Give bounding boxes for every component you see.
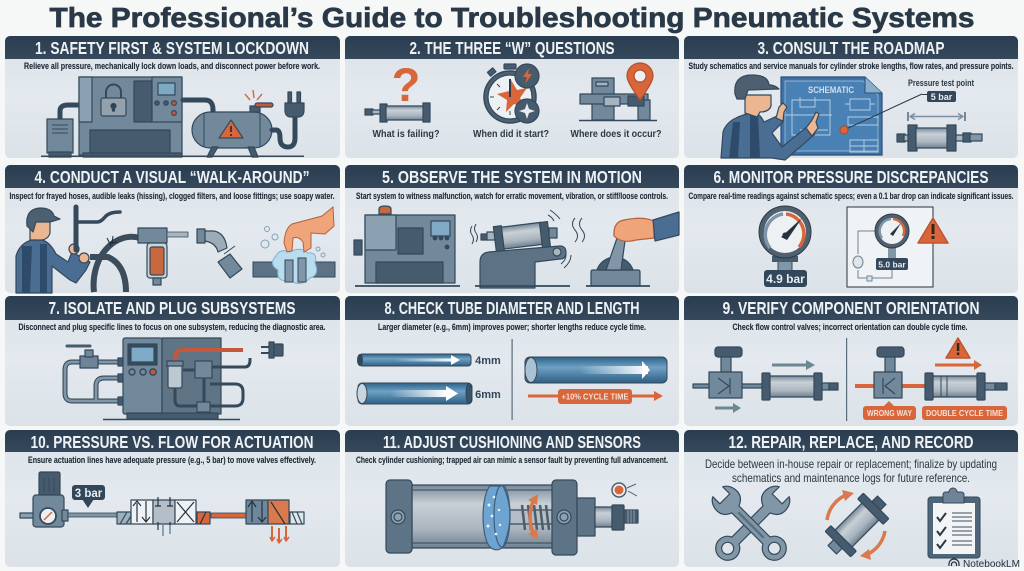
icon: stopwatch <box>484 64 539 123</box>
panel: 4 visual walk-around <box>5 165 340 293</box>
panel: 2 three W questions <box>345 36 679 158</box>
icon: warning triangle <box>918 218 948 243</box>
icon: locked machine <box>47 77 182 157</box>
icon: loose fittings <box>197 229 242 278</box>
panel: 11 cushioning and sensors <box>345 430 679 567</box>
icon: worker pointing <box>721 75 819 160</box>
heading 2: 2. THE THREE “W” QUESTIONS <box>410 38 614 58</box>
divider <box>846 338 847 421</box>
arrow with pill: +10% cycle time: +10% CYCLE TIME <box>562 392 629 402</box>
icon: worker inspecting <box>16 208 90 293</box>
label: double cycle time: DOUBLE CYCLE TIME <box>926 408 1003 418</box>
icon: running machine <box>354 206 460 286</box>
arrow: correct flow bottom <box>715 403 741 413</box>
text 11: Check cylinder cushioning; trapped air can mimic a sensor fault by preventing full advancement. <box>356 455 668 466</box>
icon: vibrating cylinder <box>470 210 584 288</box>
panel: 8 tube diameter <box>345 296 679 426</box>
heading 1: 1. SAFETY FIRST & SYSTEM LOCKDOWN <box>35 38 309 58</box>
label: 6mm: 6mm <box>475 389 501 401</box>
schematic box with gauge 5.0 bar <box>847 207 933 287</box>
heading 7: 7. ISOLATE AND PLUG SUBSYSTEMS <box>48 298 296 318</box>
orange line <box>211 513 246 518</box>
label: double cycle time <box>922 406 1007 420</box>
text 8: Larger diameter (e.g., 6mm) improves power; shorter lengths reduce cycle time. <box>378 322 646 333</box>
callout: 3 bar: 3 bar <box>75 488 103 500</box>
icon: sensor <box>612 483 637 497</box>
heading 10: 10. PRESSURE VS. FLOW FOR ACTUATION <box>30 432 314 452</box>
panel: 5 observe in motion <box>345 165 679 293</box>
icon: control cabinet with plumbing <box>65 338 250 420</box>
icon: 4mm tube <box>357 354 471 366</box>
icon: line plug <box>261 342 283 358</box>
arrow: correct flow top <box>772 360 815 370</box>
icon: replace cylinder <box>820 488 894 562</box>
text 12 <box>705 457 997 485</box>
heading 4: 4. CONDUCT A VISUAL “WALK-AROUND” <box>34 167 310 187</box>
callout: 5 bar: 5 bar <box>931 92 953 102</box>
panel: 9 component orientation <box>684 296 1018 426</box>
label: pressure test point: Pressure test point <box>908 78 975 89</box>
icon: question mark cylinder: ? <box>392 58 420 111</box>
icon: pipe and frayed hose <box>76 207 140 292</box>
heading 3: 3. CONSULT THE ROADMAP <box>758 38 945 58</box>
label: when: When did it start? <box>473 128 549 140</box>
label: wrong way <box>863 401 916 420</box>
icon: wrong-way valve and cylinder <box>855 347 1007 400</box>
arrows: cushion adjust <box>528 494 538 540</box>
text 1: Relieve all pressure, mechanically lock down loads, and disconnect power before work. <box>24 61 320 72</box>
heading 8: 8. CHECK TUBE DIAMETER AND LENGTH <box>384 298 640 318</box>
title: The Professional’s Guide to Troubleshooting Pneumatic Systems <box>50 2 974 33</box>
label: wrong way: WRONG WAY <box>867 408 912 418</box>
text 12: schematics and maintenance logs for future reference. <box>732 471 970 485</box>
callout: 3 bar <box>72 485 105 508</box>
panel: 6 monitor pressure <box>684 165 1018 293</box>
callout: 5 bar <box>922 91 956 102</box>
icon: warning triangle <box>946 338 970 358</box>
arrow with pill: +10% cycle time <box>528 389 663 404</box>
icon: question mark cylinder <box>365 58 430 122</box>
panel: 3 consult the roadmap <box>684 36 1018 160</box>
schematic box with gauge 5.0 bar: 5.0 bar <box>878 260 906 270</box>
icon: soapy water leak test <box>253 207 335 284</box>
watermark: NotebookLM: NotebookLM <box>963 558 1020 570</box>
pressure line <box>68 513 117 517</box>
divider <box>512 339 513 420</box>
heading 5: 5. OBSERVE THE SYSTEM IN MOTION <box>382 167 642 187</box>
arrow: slowed flow <box>935 360 982 370</box>
icon: 6mm tube <box>357 383 472 404</box>
heading 11: 11. ADJUST CUSHIONING AND SENSORS <box>383 432 641 452</box>
text 4: Inspect for frayed hoses, audible leaks (hissing), clogged filters, and loose fittings; use soapy water. <box>10 191 334 202</box>
text 10: Ensure actuation lines have adequate pressure (e.g., 5 bar) to move valves effectively. <box>28 455 316 466</box>
label: where: Where does it occur? <box>570 128 662 140</box>
label: what: What is failing? <box>372 128 440 140</box>
icon: cylinder with stroke dimension <box>897 112 982 151</box>
panel: 12 repair replace record <box>684 430 1018 567</box>
panel: 7 isolate and plug <box>5 296 340 426</box>
panel: 10 pressure vs flow <box>5 430 340 567</box>
icon: short large tube <box>525 357 667 383</box>
icon: second valve with exhaust <box>246 500 304 543</box>
icon: directional valve symbol <box>117 497 210 536</box>
icon: crossed wrenches <box>708 482 794 567</box>
text 7: Disconnect and plug specific lines to focus on one subsystem, reducing the diagnostic area. <box>18 322 326 333</box>
icon: compressor tank <box>183 90 304 157</box>
label: 4mm: 4mm <box>475 355 501 367</box>
icon: blueprint <box>781 77 922 155</box>
icon: machine with location pin <box>579 63 657 120</box>
icon: correct valve and cylinder <box>693 347 838 400</box>
icon: blueprint: SCHEMATIC <box>808 85 854 95</box>
icon: gauge 4.9 bar: 4.9 bar <box>766 272 805 286</box>
ground line 1 <box>41 156 304 157</box>
icon: clogged filter <box>138 228 188 285</box>
icon: hand on lever <box>586 212 679 286</box>
text 5: Start system to witness malfunction, watch for erratic movement, vibration, or stiff/loose controls. <box>356 191 668 202</box>
icon: cylinder cross-section <box>386 480 638 555</box>
icon: gauge 4.9 bar <box>759 206 811 287</box>
icon: checklist clipboard <box>928 488 980 558</box>
icon: regulator with gauge <box>20 472 68 527</box>
panel: 1 safety first <box>5 36 340 158</box>
